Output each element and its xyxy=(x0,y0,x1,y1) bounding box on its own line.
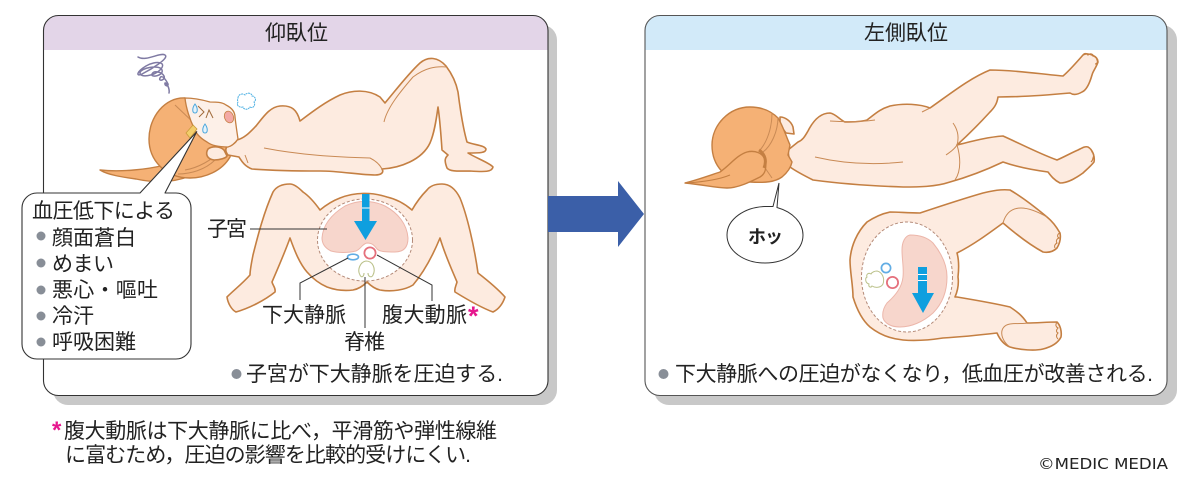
speech bubble: ホッ xyxy=(748,227,783,247)
spine xyxy=(359,261,374,277)
uterus xyxy=(883,235,947,327)
icon: dizziness squiggle xyxy=(138,54,169,93)
footnote: * xyxy=(52,417,62,444)
illustration: woman lying on left side xyxy=(685,54,1098,188)
hair tie xyxy=(759,150,765,168)
vena cava xyxy=(881,263,891,273)
icon: breath puff xyxy=(237,93,255,109)
callout: symptoms of low blood pressure: 冷汗 xyxy=(52,305,94,328)
heading: supine: 仰臥位 xyxy=(265,22,328,45)
aorta xyxy=(887,277,898,288)
body and legs xyxy=(788,54,1098,187)
heading: left lateral: 左側臥位 xyxy=(864,22,948,45)
pelvic cavity xyxy=(862,222,952,332)
ponytail xyxy=(685,151,766,188)
ear xyxy=(207,147,227,160)
callout: symptoms of low blood pressure: 血圧低下による xyxy=(32,200,175,223)
panel: left lateral position xyxy=(645,16,1177,405)
footnote xyxy=(52,417,497,467)
footnote: 腹大動脈は下大静脈に比べ，平滑筋や弾性線維 xyxy=(64,420,497,443)
label: abdominal aorta: 腹大動脈 xyxy=(382,304,467,327)
hair clip xyxy=(186,125,197,138)
toes xyxy=(1055,233,1060,339)
illustration: supine pelvis cross-section xyxy=(227,184,505,328)
panel: supine position xyxy=(44,16,557,405)
blue compression arrow xyxy=(354,194,377,240)
footnote: に富むため，圧迫の影響を比較的受けにくい. xyxy=(65,444,471,467)
hair xyxy=(712,107,792,182)
aorta xyxy=(364,247,376,259)
callout: symptoms of low blood pressure: 顔面蒼白 xyxy=(52,227,136,250)
arrow: transition to left lateral xyxy=(548,181,644,247)
illustration: left lateral pelvis cross-section xyxy=(850,190,1061,350)
eyes xyxy=(198,106,213,118)
callout: symptoms of low blood pressure xyxy=(22,132,197,359)
blue relief arrow xyxy=(912,267,934,313)
caption: supine: 子宮が下大静脈を圧迫する. xyxy=(246,363,503,386)
callout: symptoms of low blood pressure: 悪心・嘔吐 xyxy=(52,279,158,302)
label: aorta asterisk: * xyxy=(468,301,479,331)
body xyxy=(226,58,493,175)
callout: symptoms of low blood pressure: 呼吸困難 xyxy=(52,331,136,354)
mouth xyxy=(223,110,235,124)
speech bubble xyxy=(727,183,803,263)
pelvic cavity xyxy=(318,199,412,281)
uterus xyxy=(322,202,408,252)
hair xyxy=(149,98,233,178)
vena cava xyxy=(348,254,358,260)
label: uterus: 子宮 xyxy=(207,218,247,241)
leader lines xyxy=(250,229,432,328)
spine xyxy=(866,271,884,287)
callout: symptoms of low blood pressure: めまい xyxy=(52,253,114,276)
knee and foot contours xyxy=(1002,208,1047,347)
caption: left lateral: 下大静脈への圧迫がなくなり，低血圧が改善される. xyxy=(675,363,1153,386)
face xyxy=(185,98,238,147)
copyright: ©MEDIC MEDIA xyxy=(1038,455,1169,473)
sweat drops xyxy=(193,104,207,133)
toes xyxy=(1083,54,1097,162)
label: spine: 脊椎 xyxy=(344,331,385,354)
ear xyxy=(780,117,794,134)
label: inferior vena cava: 下大静脈 xyxy=(262,304,346,327)
ponytail xyxy=(100,165,190,182)
illustration: supine pregnant woman xyxy=(100,54,493,182)
